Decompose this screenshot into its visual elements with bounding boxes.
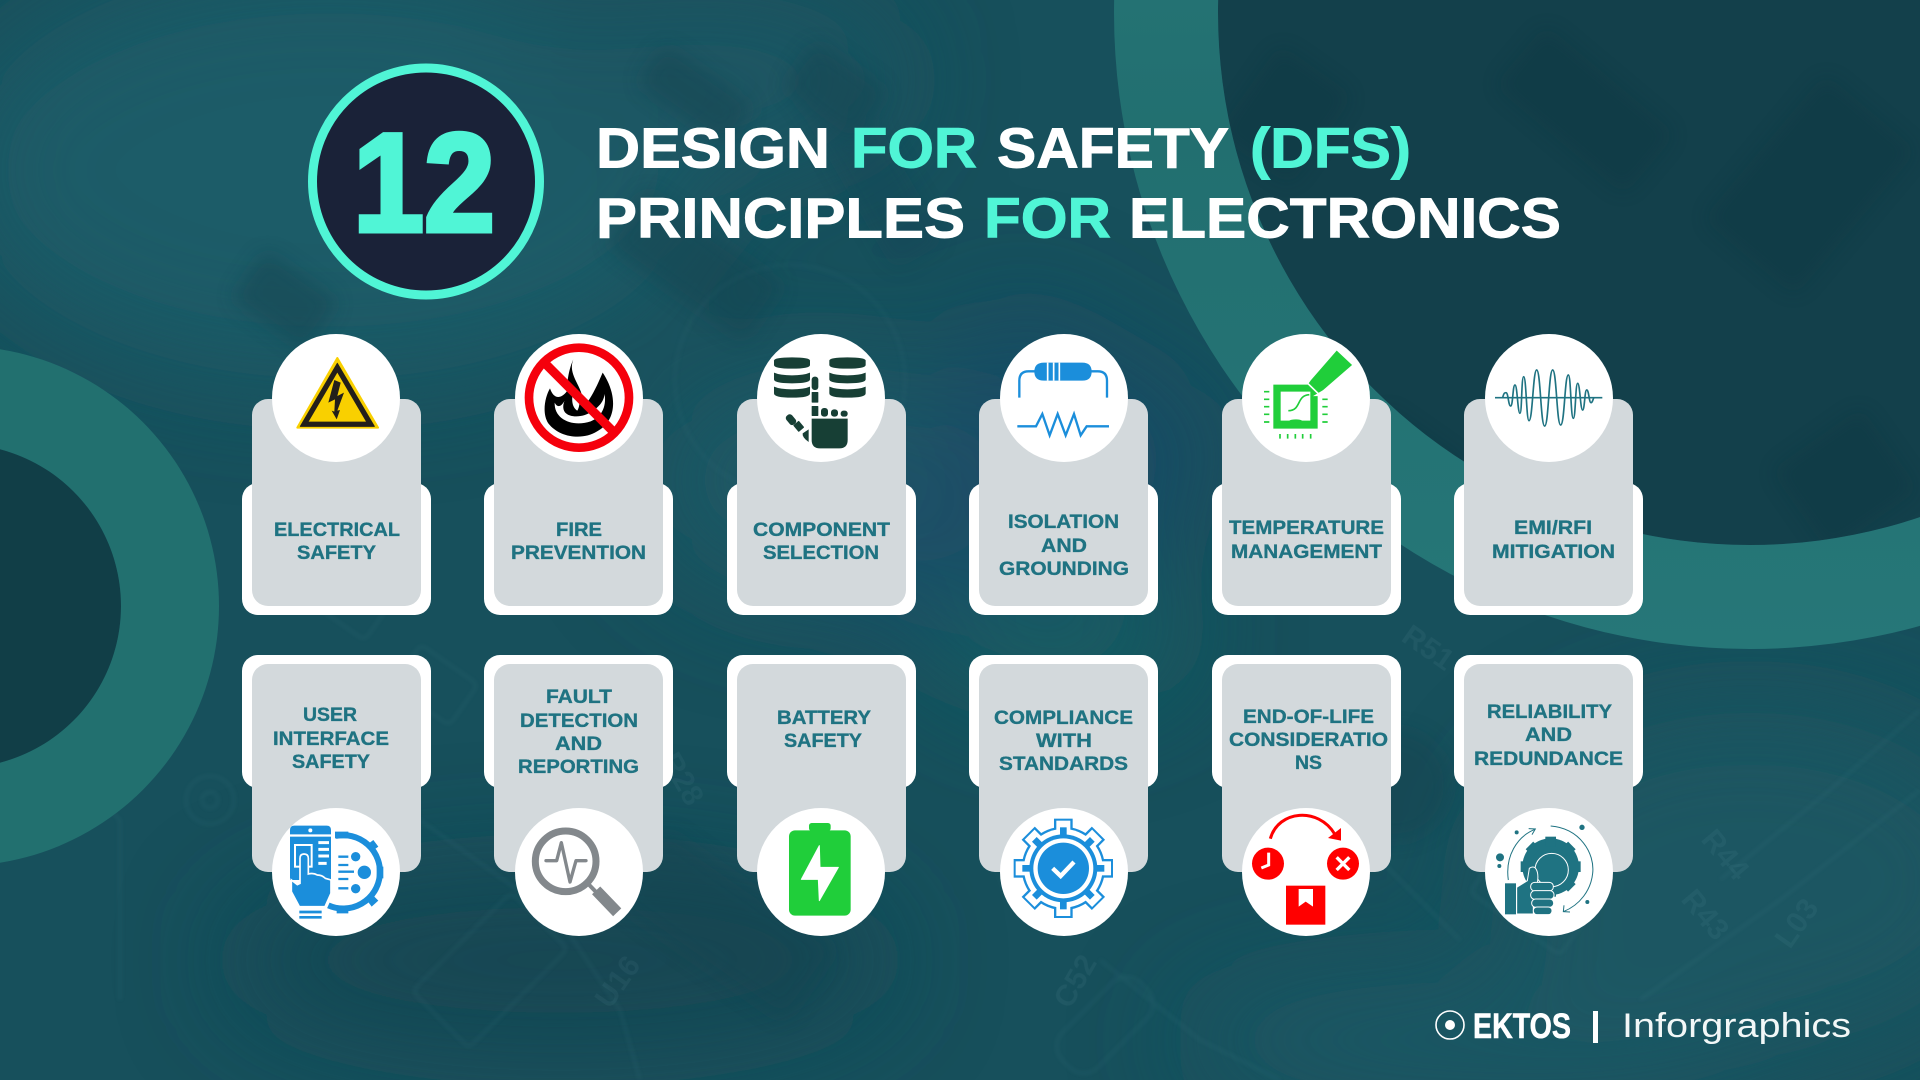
background: circuit board photo tint: L03	[1769, 893, 1825, 954]
card: isolation and grounding	[969, 334, 1158, 615]
label	[994, 707, 1133, 775]
background: circuit board photo tint: C52	[1047, 949, 1104, 1014]
label: RELIABILITY	[1487, 701, 1612, 723]
icon: high voltage warning	[297, 358, 378, 428]
title: FOR	[851, 116, 977, 180]
icon: resistor	[1017, 363, 1109, 435]
label	[1474, 701, 1623, 770]
card: component selection	[727, 334, 916, 615]
label: MITIGATION	[1492, 541, 1615, 563]
title	[596, 116, 1561, 250]
icon: magnifier with pulse	[535, 831, 617, 914]
label: AND	[1525, 724, 1572, 746]
icon: compliance gear	[1014, 819, 1113, 918]
background disc: left	[0, 444, 121, 768]
label: BATTERY	[777, 707, 871, 729]
label	[274, 519, 400, 564]
background: circuit board photo tint: U16	[589, 950, 647, 1014]
card: end of life considerations	[1212, 655, 1401, 936]
background: circuit board photo tint: R51	[1396, 619, 1460, 677]
icon: waveform	[1495, 370, 1602, 426]
footer: logo and caption: Inforgraphics	[1622, 1007, 1851, 1045]
background: circuit board photo tint: R78	[336, 799, 390, 863]
card: user interface safety	[242, 655, 431, 936]
icon: touch interface	[290, 826, 383, 917]
footer: logo and caption	[1436, 1007, 1851, 1046]
label: ISOLATION	[1008, 511, 1119, 533]
icon: reliability gear and thumbs up	[1496, 825, 1593, 915]
label: SAFETY	[297, 542, 376, 564]
label: AND	[555, 733, 602, 755]
label	[518, 686, 639, 778]
badge: number 12: 12	[353, 104, 495, 261]
label: NS	[1295, 752, 1322, 774]
label: INTERFACE	[273, 728, 389, 750]
title: (DFS)	[1250, 116, 1411, 180]
label: FIRE	[556, 519, 602, 541]
label: EMI/RFI	[1514, 517, 1592, 539]
label: GROUNDING	[999, 558, 1129, 580]
label: CONSIDERATIO	[1229, 729, 1388, 751]
background ring: left	[0, 346, 219, 866]
title: FOR	[984, 186, 1111, 250]
label	[511, 519, 646, 564]
label	[1229, 517, 1384, 563]
footer: logo and caption: EKTOS	[1473, 1007, 1571, 1046]
label: SAFETY	[292, 751, 370, 773]
label	[273, 704, 389, 773]
label: PREVENTION	[511, 542, 646, 564]
card: fault detection and reporting	[484, 655, 673, 936]
label: DETECTION	[520, 710, 638, 732]
title: DESIGN	[596, 116, 830, 180]
label: COMPONENT	[753, 519, 890, 541]
background: dark component shapes in disc	[1217, 25, 1919, 553]
label: TEMPERATURE	[1229, 517, 1384, 539]
icon: thermal paste on chip	[1264, 349, 1353, 439]
label: END-OF-LIFE	[1243, 706, 1374, 728]
title: SAFETY	[997, 116, 1229, 180]
title: PRINCIPLES	[596, 186, 965, 250]
label: SAFETY	[784, 730, 862, 752]
label	[1229, 706, 1388, 774]
background ring: top right	[1114, 0, 1920, 649]
icon: battery	[789, 823, 851, 916]
icon: component selection	[774, 357, 866, 448]
label: WITH	[1036, 730, 1092, 752]
card: reliability and redundance	[1454, 655, 1643, 936]
card: emi rfi mitigation	[1454, 334, 1643, 615]
label: USER	[303, 704, 357, 726]
label	[999, 511, 1129, 580]
card: fire prevention	[484, 334, 673, 615]
label: FAULT	[546, 686, 612, 708]
background: large dark disc top right	[1218, 0, 1920, 545]
label: REDUNDANCE	[1474, 748, 1623, 770]
card: temperature management	[1212, 334, 1401, 615]
label: REPORTING	[518, 756, 639, 778]
background: circuit board photo tint: R44	[1695, 823, 1755, 887]
label: MANAGEMENT	[1231, 541, 1382, 563]
icon: no fire	[529, 348, 629, 448]
label: AND	[1041, 535, 1087, 557]
card: compliance with standards	[969, 655, 1158, 936]
label: STANDARDS	[999, 753, 1128, 775]
card: electrical safety	[242, 334, 431, 615]
label	[1492, 517, 1615, 563]
label: SELECTION	[763, 542, 879, 564]
label	[753, 519, 890, 564]
title: ELECTRONICS	[1129, 186, 1561, 250]
background: circuit board photo tint: R28	[654, 747, 710, 811]
icon: end of life	[1252, 815, 1359, 925]
label: ELECTRICAL	[274, 519, 400, 541]
background: circuit board photo tint: R43	[1675, 883, 1735, 947]
badge: number 12	[312, 68, 540, 295]
card: battery safety	[727, 655, 916, 936]
label: COMPLIANCE	[994, 707, 1133, 729]
label	[777, 707, 871, 752]
